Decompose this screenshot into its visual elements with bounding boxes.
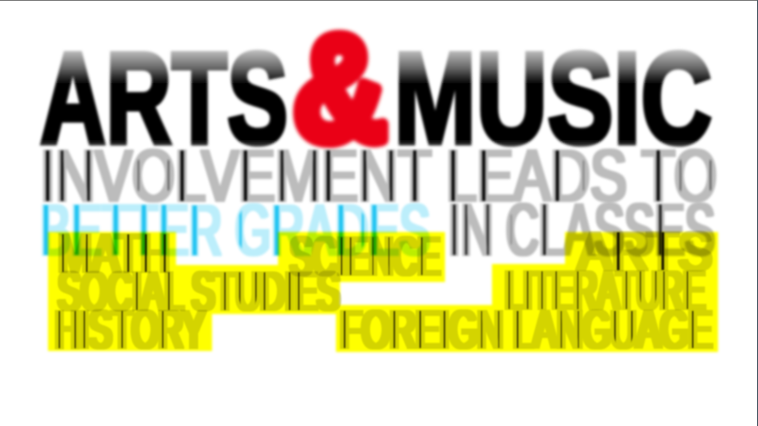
title ampersand: & <box>293 4 387 172</box>
highlight: literature <box>492 264 718 308</box>
title: arts and music <box>40 4 712 172</box>
highlight: science <box>278 232 445 282</box>
subject: science: SCIENCE <box>290 225 440 287</box>
subject: foreign language: FOREIGN LANGUAGE <box>340 299 712 360</box>
subject: arts: ARTS <box>578 220 712 282</box>
highlight: arts <box>565 232 718 272</box>
highlight: foreign language <box>336 305 718 352</box>
yellow highlight blocks <box>48 232 718 352</box>
highlight: social studies <box>48 265 340 314</box>
highlight: history <box>48 310 212 351</box>
subject: history: HISTORY <box>55 299 205 360</box>
subject: social studies: SOCIAL STUDIES <box>58 260 340 322</box>
subtitle: involvement leads to: INVOLVEMENT LEADS TO <box>40 135 717 217</box>
subtitle: in classes: IN CLASSES <box>448 190 715 270</box>
title word: arts: ARTS <box>40 25 288 171</box>
top edge line <box>0 0 758 1</box>
highlight: math <box>48 232 176 268</box>
subtitle: better grades: BETTER GRADES <box>40 189 430 271</box>
right edge strip <box>757 0 758 426</box>
subject: literature: LITERATURE <box>505 259 705 321</box>
subject: math: MATH <box>58 222 170 284</box>
